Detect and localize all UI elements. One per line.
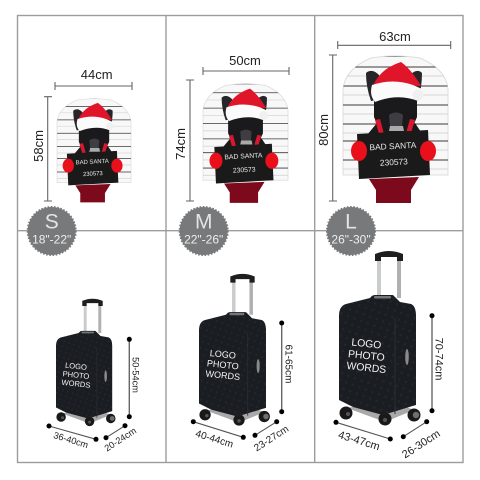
width dimension 40-44cm: [191, 419, 246, 451]
luggage M: [199, 274, 270, 426]
badge L: [327, 207, 375, 255]
cover S artwork: 230573: [83, 171, 104, 178]
luggage S: PHOTO: [62, 369, 90, 381]
height dimension 58cm: 58cm: [31, 130, 46, 162]
badge L: L: [345, 210, 357, 234]
badge S: S: [45, 210, 59, 234]
cover L artwork: [343, 56, 448, 203]
width dimension 40-44cm: 40-44cm: [194, 429, 234, 451]
width dimension 43-47cm: 43-47cm: [337, 429, 381, 453]
luggage L: [339, 251, 420, 426]
height dimension 61-65cm: [279, 320, 294, 414]
cover L artwork: 230573: [380, 156, 408, 168]
luggage S: [56, 299, 115, 426]
height dimension 50-54cm: 50-54cm: [130, 357, 140, 393]
height dimension 70-74cm: 70-74cm: [432, 338, 444, 380]
badge M: M: [195, 210, 212, 234]
height dimension 80cm: [316, 55, 337, 201]
luggage L: WORDS: [346, 361, 387, 376]
cover M artwork: 230573: [233, 167, 256, 175]
badge M: [180, 207, 228, 255]
width dimension 50cm: 50cm: [229, 53, 261, 68]
panel: large cover diagram: [316, 29, 451, 203]
width dimension 36-40cm: 36-40cm: [52, 430, 90, 450]
height dimension 61-65cm: 61-65cm: [282, 345, 294, 383]
cover L artwork: BAD SANTA: [369, 140, 417, 152]
height dimension 50-54cm: [127, 337, 140, 419]
height dimension 74cm: 74cm: [173, 128, 188, 160]
width dimension 63cm: [338, 29, 451, 49]
panel: medium luggage: [191, 274, 294, 454]
cover S artwork: [57, 99, 131, 202]
luggage L: PHOTO: [347, 349, 385, 364]
luggage L: LOGO: [351, 337, 382, 352]
panel: medium cover diagram: [173, 53, 289, 203]
cover M artwork: [203, 84, 288, 203]
depth dimension 23-27cm: 23-27cm: [252, 424, 291, 454]
depth dimension 20-24cm: 20-24cm: [103, 425, 138, 453]
luggage M: LOGO: [209, 348, 236, 361]
width dimension 50cm: [203, 53, 289, 75]
panel: small cover diagram: [31, 67, 132, 202]
badge S: [28, 207, 76, 255]
depth dimension 26-30cm: 26-30cm: [400, 428, 443, 461]
height dimension 70-74cm: [430, 313, 444, 413]
panel: large luggage: [334, 251, 444, 461]
width dimension 44cm: 44cm: [81, 67, 113, 82]
badge M: 22"-26": [184, 232, 223, 246]
cover S artwork: BAD SANTA: [76, 159, 109, 166]
height dimension 74cm: [173, 80, 194, 201]
width dimension 43-47cm: [334, 420, 393, 453]
width dimension 63cm: 63cm: [379, 29, 411, 44]
panel: small luggage: [46, 299, 140, 453]
badge L: 26"-30": [331, 232, 371, 246]
luggage M: WORDS: [205, 369, 241, 382]
height dimension 80cm: 80cm: [316, 114, 331, 146]
luggage S: WORDS: [61, 378, 91, 390]
luggage S: LOGO: [65, 361, 87, 372]
width dimension 36-40cm: [46, 424, 98, 450]
badge S: 18"-22": [32, 232, 71, 246]
luggage M: PHOTO: [206, 358, 239, 371]
cover M artwork: BAD SANTA: [224, 152, 263, 161]
